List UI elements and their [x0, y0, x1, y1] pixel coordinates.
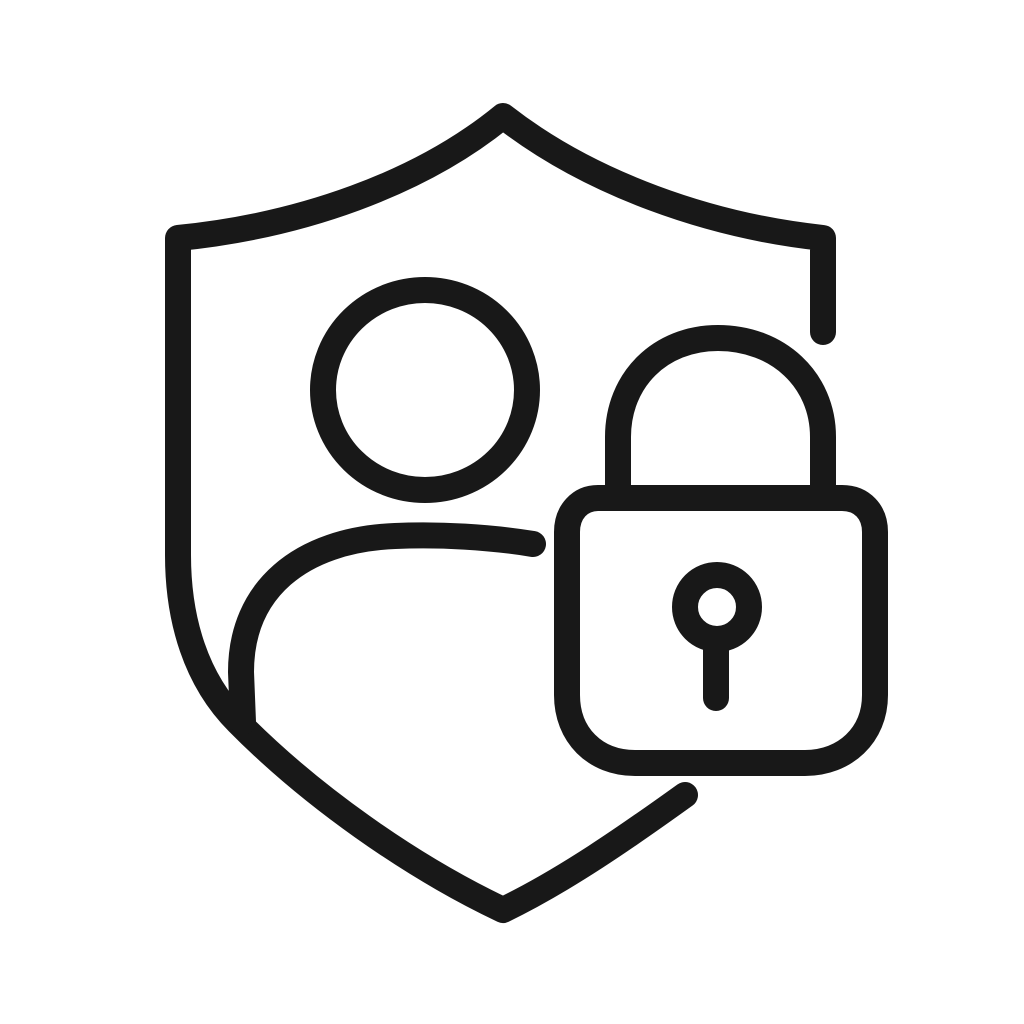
user head	[323, 290, 527, 490]
keyhole ring	[685, 575, 749, 639]
keyhole	[685, 575, 749, 698]
padlock body	[567, 498, 875, 763]
shield outline	[178, 116, 823, 910]
keyhole stem	[703, 640, 729, 698]
user shoulders	[241, 535, 533, 722]
padlock	[567, 338, 875, 763]
icon: privacy shield with user and padlock	[178, 116, 875, 910]
padlock shackle	[618, 338, 823, 497]
